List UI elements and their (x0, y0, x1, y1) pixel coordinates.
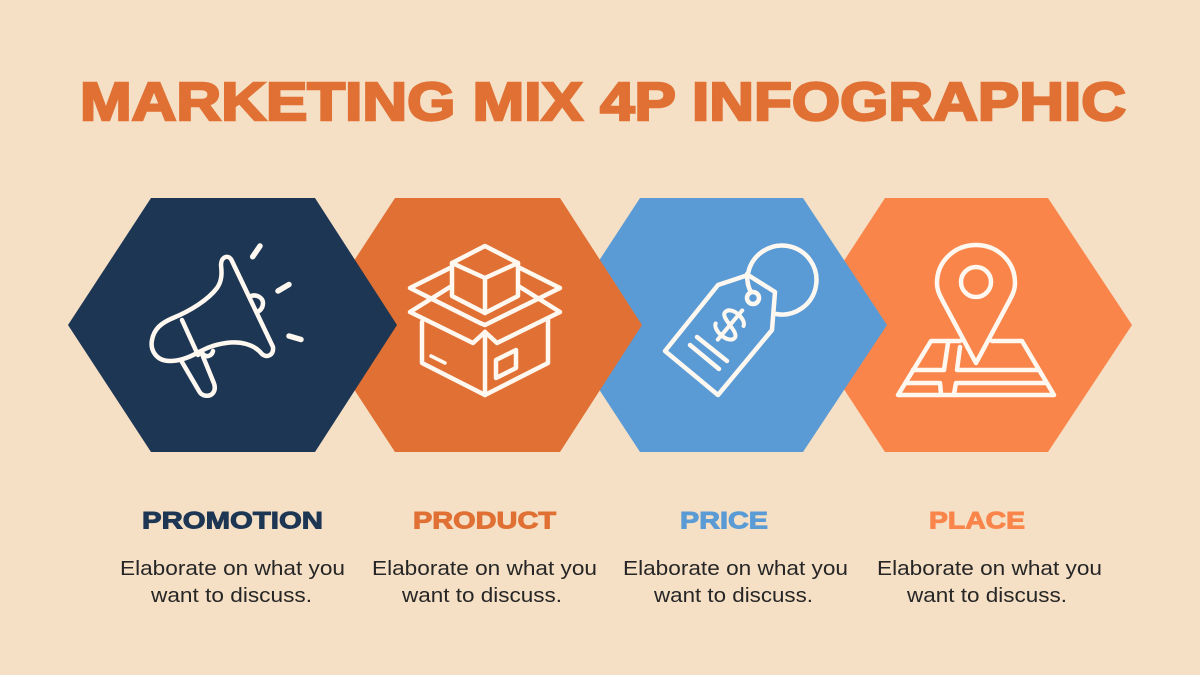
heading: promotion: PROMOTION (142, 508, 323, 534)
heading: place: PLACE (929, 508, 1025, 534)
title: MARKETING MIX 4P INFOGRAPHIC (80, 72, 1126, 132)
text: place description (877, 558, 1102, 607)
text: promotion description (120, 558, 345, 607)
icon: map pin (898, 245, 1054, 395)
hexagon: price (557, 198, 887, 452)
icon: open box (410, 246, 560, 395)
text: promotion description: Elaborate on what you (120, 558, 345, 580)
icon: price tag (665, 246, 816, 395)
text: product description: want to discuss. (401, 585, 562, 607)
hexagon: promotion (68, 198, 397, 452)
icon: megaphone (152, 246, 301, 396)
text: price description: Elaborate on what you (623, 558, 848, 580)
text: promotion description: want to discuss. (150, 585, 312, 607)
text: place description: Elaborate on what you (877, 558, 1102, 580)
text: product description: Elaborate on what you (372, 558, 597, 580)
text: place description: want to discuss. (906, 585, 1067, 607)
heading: product: PRODUCT (413, 508, 556, 534)
text: product description (372, 558, 597, 607)
hexagon: product (312, 198, 642, 452)
heading: price: PRICE (680, 508, 768, 534)
text: price description: want to discuss. (653, 585, 813, 607)
text: price description (623, 558, 848, 607)
hexagon: place (802, 198, 1132, 452)
